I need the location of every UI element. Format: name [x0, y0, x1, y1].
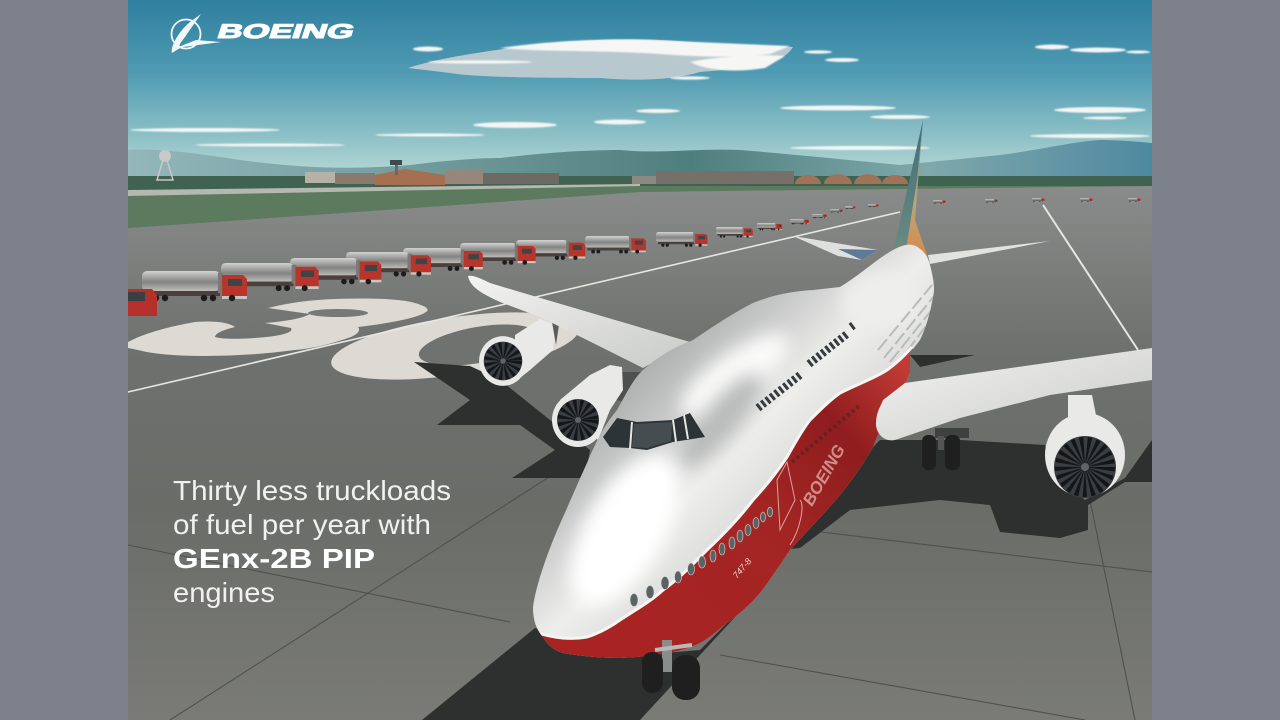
headline text: Thirty less truckloads [173, 475, 451, 506]
runway strip [128, 184, 640, 196]
headline text: of fuel per year with [173, 509, 431, 540]
livery name: BOEING [799, 441, 849, 509]
horizontal stabilizers [793, 236, 1050, 264]
upper deck windows [758, 324, 855, 408]
red livery marks [777, 405, 860, 545]
headline text [173, 475, 451, 608]
boeing logo [172, 14, 358, 53]
far wing [468, 276, 690, 368]
engine left inner [552, 365, 642, 447]
main cloud [408, 39, 793, 80]
runway lines [128, 205, 1138, 392]
small clouds [130, 44, 1150, 150]
headline text: engines [173, 577, 275, 608]
pavement joints [128, 470, 1152, 720]
infographic scene [128, 0, 1152, 720]
mountains [128, 140, 1152, 180]
boeing logo: BOEING [214, 20, 358, 43]
fuselage [533, 244, 934, 658]
fuel truck convoy [128, 198, 1141, 316]
model label: 747-8 [731, 556, 753, 580]
rear fuselage ribs [878, 285, 934, 366]
airport buildings [157, 150, 908, 185]
cheatline [538, 347, 912, 638]
side panel right [1152, 0, 1280, 720]
grass [128, 176, 1152, 230]
cockpit windows [603, 413, 705, 450]
aircraft shadows [414, 355, 1152, 720]
fuselage highlights [564, 265, 880, 608]
engine left outer [479, 318, 560, 386]
fuselage red belly [540, 347, 913, 658]
tarmac [128, 186, 1152, 720]
headline text: GEnx-2B PIP [173, 543, 375, 574]
nose landing gear [642, 640, 700, 700]
main deck windows [630, 507, 772, 606]
sky [128, 0, 1152, 180]
vertical tail [894, 120, 928, 258]
painted number 30 [128, 298, 583, 392]
engine right [1045, 395, 1125, 498]
side panel left [0, 0, 128, 720]
main landing gear [922, 428, 969, 470]
near wing [876, 348, 1152, 440]
